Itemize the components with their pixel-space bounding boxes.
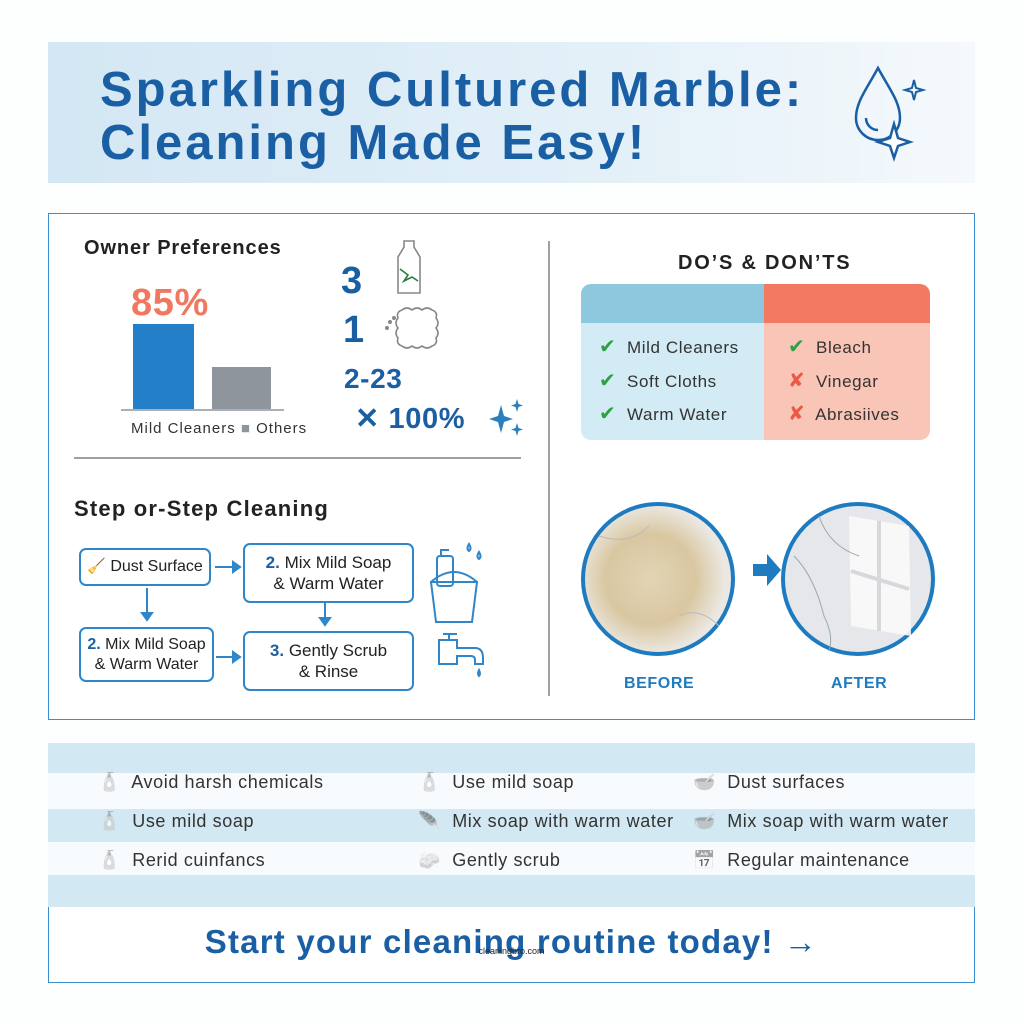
header band xyxy=(48,42,975,183)
stats list: 2-23 xyxy=(344,363,402,394)
step: dust surface: 🧹 xyxy=(87,558,106,575)
main panel xyxy=(48,213,975,720)
icon: sparkles xyxy=(489,399,523,436)
call to action: cleaningbro.com xyxy=(478,946,545,956)
before after xyxy=(581,502,935,692)
title: Cleaning Made Easy! xyxy=(100,116,647,170)
step heading: Step or-Step Cleaning xyxy=(74,496,329,521)
step: mix soap 2 xyxy=(79,627,214,682)
icon: bucket and bottle xyxy=(431,544,480,622)
arrows xyxy=(140,542,484,678)
tips band: 🧴 Use mild soap xyxy=(98,811,254,831)
dos and donts heading: DO’S & DON’TS xyxy=(678,252,851,274)
step: scrub xyxy=(243,631,414,691)
main panel: BEFORE xyxy=(624,675,694,692)
dos and donts table: ✔ Soft Cloths xyxy=(599,370,717,392)
dos and donts table: ✘ Vinegar xyxy=(788,370,878,392)
title xyxy=(100,63,804,170)
stats list xyxy=(341,240,523,436)
step flow xyxy=(79,542,484,691)
tips band xyxy=(48,743,975,907)
step: dust surface: Dust Surface xyxy=(110,558,203,575)
step: dust surface xyxy=(79,548,211,586)
icon: faucet xyxy=(439,634,483,676)
dos and donts table: ✔ Bleach xyxy=(788,336,872,358)
tips band: 🪶 Mix soap with warm water xyxy=(418,811,674,831)
icon: broken bottle xyxy=(397,240,421,294)
owner preferences heading: Owner Preferences xyxy=(84,237,282,259)
step: mix soap: 2. Mix Mild Soap xyxy=(266,553,391,572)
main panel: AFTER xyxy=(831,675,887,692)
bar chart xyxy=(121,282,307,437)
step: mix soap xyxy=(243,543,414,603)
stats list: 3 xyxy=(341,260,363,302)
bar chart: Mild Cleaners ■ Others xyxy=(131,420,307,437)
bar chart: 85% xyxy=(131,282,209,324)
dos and donts table: ✔ Warm Water xyxy=(599,403,727,425)
step: mix soap 2: 2. Mix Mild Soap xyxy=(87,636,206,652)
tips band: 🥣 Dust surfaces xyxy=(693,772,845,792)
icon: sponge xyxy=(385,307,439,349)
tips band: 🧴 Avoid harsh chemicals xyxy=(98,772,324,792)
tips band: 🧴 Rerid cuinfancs xyxy=(98,850,265,870)
call to action: Start your cleaning routine today! → xyxy=(205,923,818,960)
tips band: 📅 Regular maintenance xyxy=(693,850,910,870)
dos and donts table: ✔ Mild Cleaners xyxy=(599,336,739,358)
stats list: ✕ 100% xyxy=(355,403,465,435)
stats list: 1 xyxy=(343,309,365,351)
tips band: 🧽 Gently scrub xyxy=(418,850,560,870)
dos and donts table xyxy=(581,284,930,440)
call to action xyxy=(48,907,975,983)
tips band: 🧴 Use mild soap xyxy=(418,772,574,792)
icon: water drop with sparkles xyxy=(854,66,926,162)
dos and donts table: ✘ Abrasiives xyxy=(788,403,900,425)
title: Sparkling Cultured Marble: xyxy=(100,63,804,117)
tips band: 🥣 Mix soap with warm water xyxy=(693,811,949,831)
step: mix soap 2: & Warm Water xyxy=(95,656,198,672)
step: scrub: & Rinse xyxy=(299,662,358,681)
step: mix soap: & Warm Water xyxy=(273,574,384,593)
step: scrub: 3. Gently Scrub xyxy=(270,641,387,660)
